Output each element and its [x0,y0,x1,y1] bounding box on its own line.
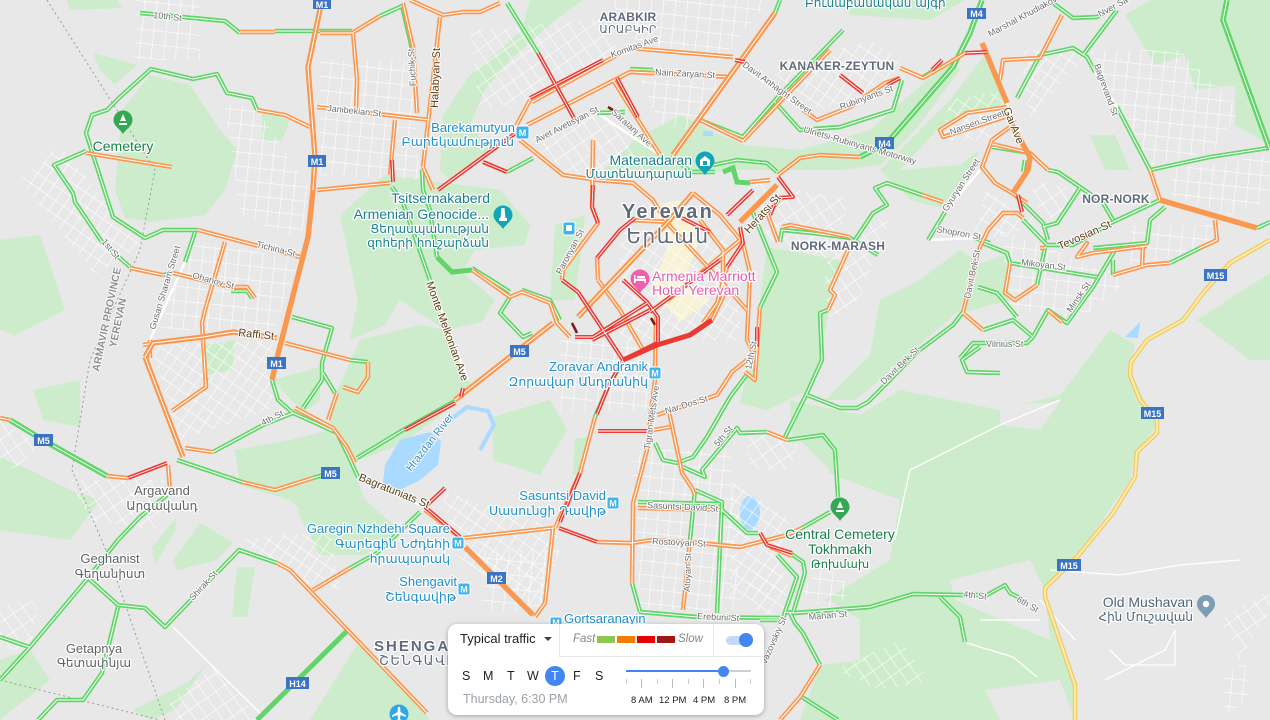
route shields: M4 [970,9,983,19]
district labels: NOR-NORK [1082,192,1150,206]
major roads: solid thick (orange) [272,43,1257,615]
street name labels: Davit Bek St [962,248,982,299]
street name labels: Komitas Ave [609,33,660,60]
street name labels: Vazovskiy St [759,615,789,666]
street name labels: Heratsi St [742,192,784,236]
street name labels: Janibekian St [327,103,382,119]
legend: fast to slow: Slow [678,633,703,645]
attraction labels: Tsitsernakaberd [391,190,490,206]
slider time labels [631,695,746,706]
street name labels: 5th St [712,423,735,448]
route shields: M5 [37,436,50,446]
street name labels: 10th St [153,10,183,23]
locality labels: Արգավանդ [126,499,198,513]
pale central district tint [650,200,710,322]
transit labels [307,120,648,626]
administrative boundary (dashed) [0,0,165,720]
attraction labels: Մատենադարան [586,167,692,181]
traffic roads: slow (red) [128,52,1022,553]
locality labels: Գետափնյա [57,656,131,670]
street name labels: Monte Melkonian Ave [423,280,470,383]
street name labels: Nairi Zaryan St [655,67,716,80]
attraction labels: Central Cemetery [785,526,895,542]
attraction labels: Ցեղասպանության [370,222,489,236]
water: lake and river [382,131,1140,530]
street name labels: Bagrevand St [1092,62,1120,117]
street name labels: Shopron St [936,224,982,242]
icons: metro stations: M [454,538,462,548]
route shields: M15 [1207,271,1224,281]
attraction labels: Թոխմախ [811,557,869,571]
unsignalled labelled streets [150,65,1117,507]
province boundary label: YEREVAN [107,297,129,349]
day selector: M [483,669,493,683]
slider time labels: 4 PM [693,695,715,706]
street name labels: 4th St [963,589,988,601]
place label: Yerevan [622,201,714,248]
icons: metro stations: M [552,618,560,628]
street name labels: Ohanov St [191,270,236,291]
time slider [626,666,751,688]
transit labels: Սասունցի Դավիթ [489,503,607,518]
street name labels: Gusan Sharam Street [147,244,183,331]
attraction labels: Tokhmakh [808,541,872,557]
icon: hotel pin [630,270,650,293]
street name labels: Rubinyants St [838,83,895,112]
icon: cemetery pin [114,110,132,134]
street name labels: Sasuntsi David St [647,500,719,514]
street name labels: Rostovyan St [652,536,706,549]
locality labels: Argavand [134,483,190,498]
street name labels: Mikoyan St [1021,257,1067,272]
district labels: ՇԵՆԳԱՎԻԹ [379,654,470,669]
street name labels: 6th St [1015,594,1041,615]
street name labels: Mahari St [808,609,848,622]
street name labels: Davit Bek St [878,345,921,386]
street name labels: Tigran Mets Ave [642,385,661,450]
transit labels: Barekamutyun [431,120,515,135]
transit labels: Բարեկամություն [402,134,514,149]
street name labels: Nar Dos St [664,393,709,416]
street name labels: 4th St [259,408,285,428]
icon: genocide memorial pin [494,206,512,229]
card title: typical traffic dropdown: Typical traffic [460,631,536,646]
district labels: KANAKER-ZEYTUN [780,59,894,73]
icon: Old Mushavan pin [1197,595,1215,618]
district labels [374,10,1150,669]
day selector [462,666,603,686]
street name labels: Ulnetsi-Rubinyants Motorway [802,124,918,166]
very slow segments (dark red) [572,107,655,333]
day selector: F [573,669,581,683]
street name labels: Davit Anhaght Street [741,60,814,116]
street name labels: Tichina St [256,239,297,259]
route shields: H14 [289,679,306,689]
street name labels: Hrazdan River [404,411,457,474]
hotel label: Hotel Yerevan [652,282,739,298]
hotel label [652,268,756,298]
day selector: T [507,669,515,683]
transit labels: Sasuntsi David [519,488,606,503]
locality labels [57,483,1193,670]
icon: Matenadaran museum pin [696,152,714,175]
street name labels: 12th St [743,340,759,370]
gray clearings inside the large park [760,402,1075,720]
icons: metro stations: M [519,128,526,138]
street name labels: Minsk St [1064,280,1093,314]
slider time labels: 8 AM [631,695,653,706]
day selector: T [551,669,559,683]
highways: fast thick (green) [257,168,750,720]
street name labels: 1st St [99,237,122,261]
street name labels: Gai Ave [1000,106,1026,146]
route shields: M15 [1144,409,1161,419]
street name labels: Shirak St [187,568,220,602]
transit labels: Shengavit [399,574,457,589]
attraction labels: Cemetery [93,138,153,154]
day selector: S [462,669,470,683]
legend: fast to slow: Fast [573,633,595,645]
attraction labels [93,0,946,571]
day selector: W [527,669,539,683]
card dividers [559,624,763,657]
traffic control card [448,624,764,715]
route shields: M2 [490,574,503,584]
route shields: M1 [270,359,283,369]
vertical divider before toggle [713,624,714,656]
street name labels: Vilnius St [986,339,1024,349]
motorways: fast wide (green) [10,0,1270,476]
street name labels: Fuchik St [406,48,418,86]
transit labels: Զորավար Անդրանիկ [509,374,648,389]
icons: metro stations: M [651,368,659,378]
date and time text: Thursday, 6:30 PM [463,692,568,706]
attraction labels: Armenian Genocide... [354,206,489,222]
transit labels: հրապարակ [370,551,450,566]
slider time labels: 12 PM [659,695,686,706]
transit labels: Garegin Nzhdehi Square [307,521,450,536]
street name labels: Bagratuniats St [357,472,431,511]
district labels: SHENGAVIT [374,638,478,655]
district labels: ARABKIR [600,10,656,24]
street name labels [99,0,1130,666]
street name labels: Avet Avetisyan St [533,104,600,145]
legend: fast to slow [573,633,704,645]
route shields: M1 [316,0,328,10]
heavy congestion segment (thick red) [623,320,712,360]
transit labels: Գարեգին Նժդեհի [335,536,450,551]
minor white roads [173,400,1240,713]
locality labels: Getapnya [66,641,123,656]
icons: metro stations: M [460,584,468,594]
icon: central cemetery pin [830,498,850,521]
route shields: M4 [878,139,891,149]
place label: Yerevan: Yerevan [622,201,714,223]
attraction labels: Matenadaran [609,152,692,168]
street name labels: Atoyan St [682,552,693,592]
street name labels: Nansen Street [948,108,1006,137]
district labels: ԱՐԱԲԿԻՐ [599,23,657,36]
icon: railway station [563,222,575,235]
street name labels: Halabyan St [429,48,443,108]
toggle switch [726,633,753,647]
province boundary label: ARMAVIR PROVINCE [90,266,124,373]
locality labels: Գեղանիստ [75,567,145,581]
district labels: NORK-MARASH [791,239,885,253]
icons: metro stations: M [609,498,617,508]
icon: airport [390,704,408,720]
locality labels: Old Mushavan [1103,594,1193,610]
street name labels: Paronyan St [554,227,586,276]
street name labels: Erebuni St [697,611,740,623]
locality labels: Հին Մուշավան [1098,610,1193,624]
day selector: S [595,669,603,683]
icons: metro stations [452,126,661,628]
street name labels: Saralanj Ave [610,107,654,148]
street name labels: Tevosian St [1056,219,1113,253]
place label: Yerevan: Երևան [626,224,710,248]
attraction labels: զոհերի հուշարձան [367,236,489,250]
route shields: M5 [324,469,337,479]
route shields: M1 [311,157,323,167]
hotel label: Armenia Marriott [652,268,756,284]
route shields: M5 [513,347,526,357]
transit labels: Շենգավիթ [385,589,457,604]
road M15 (yellow) [1045,240,1270,720]
transit labels: Gortsaranayin [564,611,646,626]
transit labels: Zoravar Andranik [549,359,648,374]
major roads: medium double carriageways (orange) [145,0,775,457]
street name labels: Raffi St [238,327,275,343]
route shields: M15 [1060,561,1078,571]
slider time labels: 8 PM [724,695,746,706]
locality labels: Geghanist [80,551,140,566]
street name labels: Gyuryan Street [940,156,982,213]
